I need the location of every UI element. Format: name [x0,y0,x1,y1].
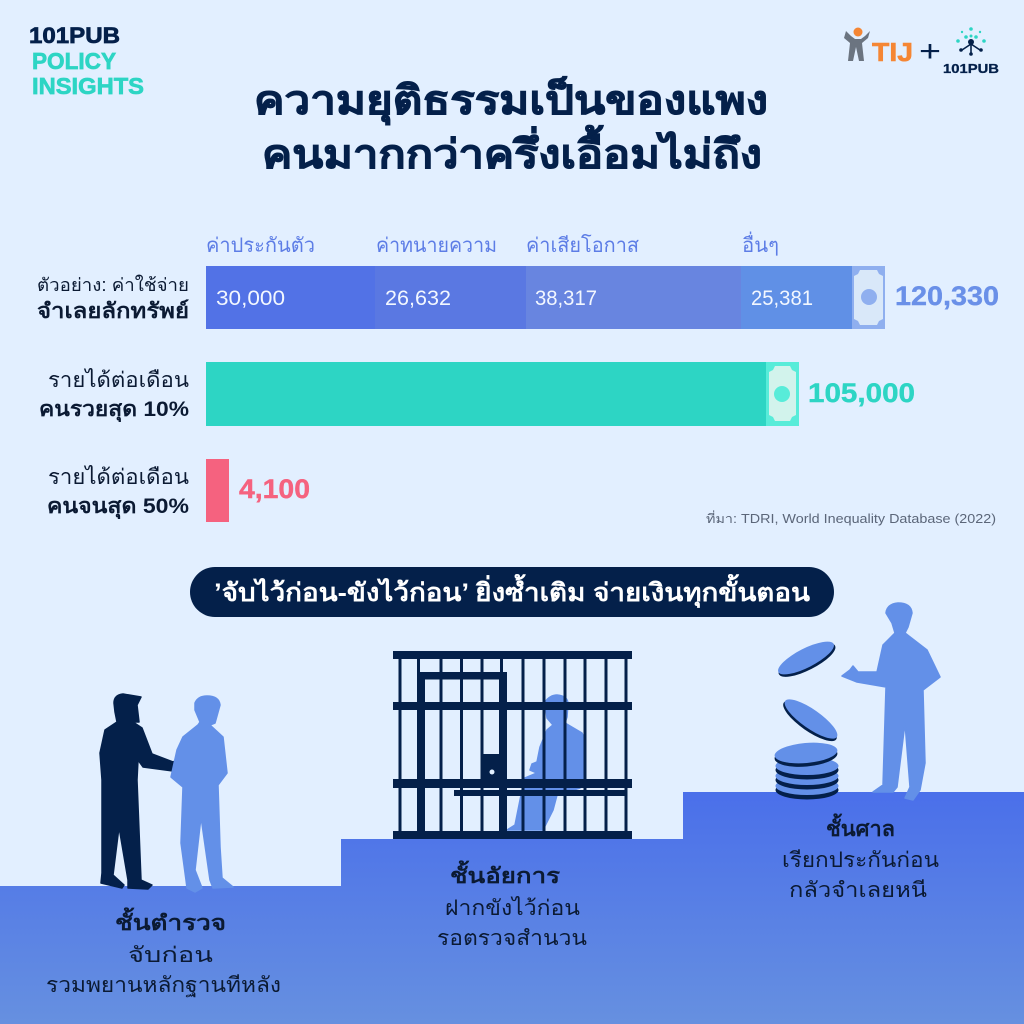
icon: jail cell bars [393,651,632,839]
partner logos: TIJ + 101PUB [844,27,999,76]
icon: banknote on cost bar [852,266,885,329]
step text: prosecutor [437,860,587,950]
icon: seated prisoner [507,695,585,830]
panel: court stage [683,603,1024,1024]
column labels: cost categories: ค่าเสียโอกาส [526,234,639,257]
icon: dark figure arresting [100,694,186,889]
total: 4,100: 4,100 [239,474,310,504]
row label: richest 10% [39,368,189,423]
source note: ที่มา: TDRI, World Inequality Database (2022) [706,510,996,526]
bar: poorest 50% income [206,459,229,522]
bar chart: cost versus income [37,231,999,522]
section banner [190,567,834,617]
step block: police [0,886,341,1024]
brand logo: 101PUB Policy Insights: 101PUB [29,23,120,48]
title: ความยุติธรรมเป็นของแพง [254,75,768,126]
stacked bar: defendant costs: 30,000 [216,287,285,310]
partner logos: TIJ + 101PUB: + [919,35,941,68]
icon: standing figure gesturing [842,603,940,800]
partner logos: TIJ + 101PUB: TIJ [872,37,913,67]
brand logo: 101PUB Policy Insights [29,23,144,99]
step text: court: เรียกประกันก่อน [782,849,939,872]
row label: poorest 50%: รายได้ต่อเดือน [48,465,189,489]
step text: police: จับก่อน [128,944,213,967]
step text: court [782,813,939,902]
total: 120,330: 120,330 [895,281,999,311]
bar: richest 10% income [206,362,766,426]
step text: police [46,907,281,997]
column labels: cost categories: ค่าประกันตัว [206,235,315,257]
step block: court [683,792,1024,1024]
title [254,75,768,177]
step text: police: ชั้นตำรวจ [115,907,226,935]
icon: banknote on income bar [766,362,799,426]
step text: prosecutor: ฝากขังไว้ก่อน [445,896,580,920]
column labels: cost categories: อื่นๆ [742,231,779,257]
total: 105,000: 105,000 [808,378,915,408]
title: คนมากกว่าครึ่งเอื้อมไม่ถึง [262,125,762,177]
icon: coins [774,635,842,800]
step text: court: ชั้นศาล [826,813,895,841]
row label: richest 10%: รายได้ต่อเดือน [48,368,189,392]
panel: prosecutor stage [341,651,683,1024]
row label: bail cost [37,274,189,323]
panel: police stage [0,694,341,1024]
stacked bar: defendant costs: 26,632 [385,287,451,310]
row label: poorest 50%: คนจนสุด 50% [47,495,189,520]
step block: prosecutor [341,839,683,1024]
step text: prosecutor: ชั้นอัยการ [450,860,561,888]
row label: bail cost: ตัวอย่าง: ค่าใช้จ่าย [37,274,189,295]
step text: prosecutor: รอตรวจสำนวน [437,927,587,950]
row label: bail cost: จำเลยลักทรัพย์ [37,299,189,323]
step text: police: รวมพยานหลักฐานทีหลัง [46,974,281,997]
section banner: ’จับไว้ก่อน-ขังไว้ก่อน’ ยิ่งซ้ำเติม จ่ายเงินทุกขั้นตอน [214,573,810,609]
step text: court: กลัวจำเลยหนี [789,879,927,902]
brand logo: 101PUB Policy Insights: INSIGHTS [32,73,144,99]
icon: light figure detained [171,696,233,892]
stacked bar: defendant costs [206,266,852,329]
stacked bar: defendant costs: 25,381 [751,287,813,310]
column labels: cost categories: ค่าทนายความ [376,235,497,257]
icon: keyhole [490,770,494,774]
stacked bar: defendant costs: 38,317 [535,287,597,310]
row label: richest 10%: คนรวยสุด 10% [39,398,189,423]
partner logos: TIJ + 101PUB: 101PUB [943,62,999,76]
row label: poorest 50% [47,465,189,520]
brand logo: 101PUB Policy Insights: POLICY [32,48,116,74]
column labels: cost categories [206,231,779,257]
